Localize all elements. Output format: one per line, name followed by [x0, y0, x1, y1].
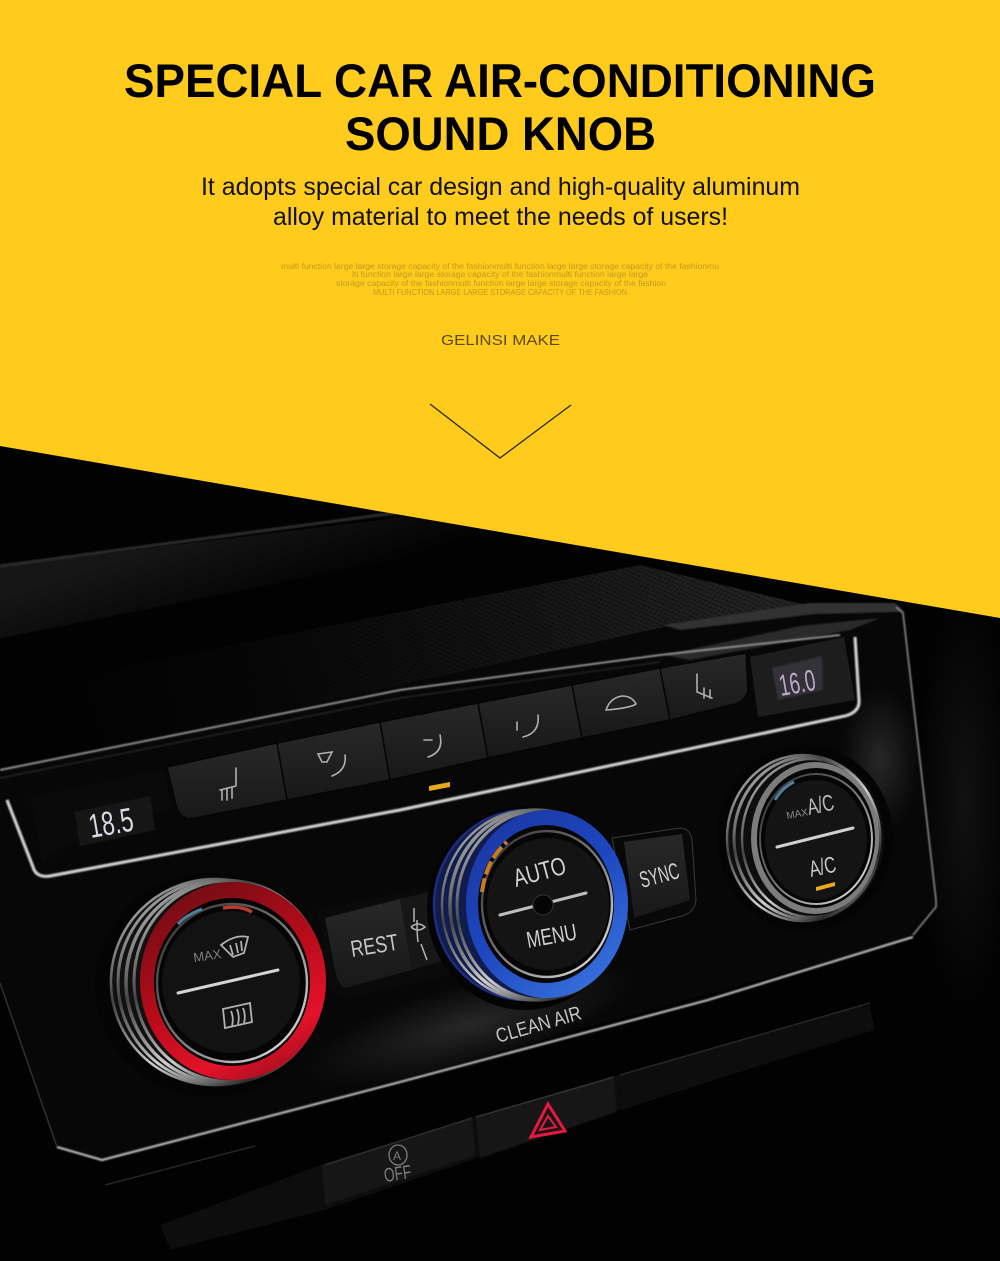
knob face — [162, 911, 300, 1053]
label: sync: SYNC — [637, 859, 682, 894]
amber indicator — [429, 782, 450, 791]
icon: seat heat left — [220, 768, 236, 800]
fine print: lti function large large storage capacity of the fashionmulti function large large — [352, 270, 649, 279]
chevron arrow — [430, 404, 571, 458]
glossy reflection — [295, 938, 645, 1112]
indicator line — [500, 893, 586, 915]
label: menu: MENU — [525, 920, 579, 954]
indicator line — [178, 970, 278, 993]
button: rest — [325, 899, 412, 988]
bottom chrome edge — [57, 937, 913, 1160]
indicator line — [777, 828, 853, 847]
button: recirculate — [572, 668, 670, 738]
brand label: GELINSI MAKE — [441, 332, 560, 349]
icon: fan — [411, 908, 427, 960]
button: windshield air — [277, 722, 390, 800]
label: max a/c: MAX — [786, 807, 809, 822]
icon: seat heat right — [697, 674, 712, 698]
subtitle: It adopts special car design and high-quality aluminum — [201, 173, 800, 201]
photo background — [0, 440, 1000, 1261]
button icons — [220, 674, 712, 800]
fine print: multi function large large storage capacity of the fashionmulti function large large storage capacity of the fashionmu — [281, 262, 719, 271]
knob: silver — [717, 745, 893, 931]
button row — [167, 653, 748, 819]
red ring — [140, 882, 326, 1080]
label: max: MAX — [192, 946, 223, 965]
title: SOUND KNOB — [345, 107, 656, 160]
subtitle: alloy material to meet the needs of users! — [273, 203, 728, 231]
button: fan — [400, 890, 446, 970]
panel outer highlights — [664, 603, 905, 630]
fine print — [281, 262, 719, 297]
left display — [30, 770, 172, 863]
knob face — [765, 780, 867, 900]
title: SPECIAL CAR AIR-CONDITIONING — [124, 54, 876, 107]
icon: rear defrost — [223, 1003, 252, 1028]
label: a/c upper: A/C — [805, 790, 837, 821]
yellow header background — [0, 0, 1000, 618]
button: foot air — [478, 685, 582, 758]
icon: foot air — [517, 715, 538, 737]
temperature right: 16.0 — [776, 664, 818, 703]
icon: hazard triangle — [531, 1104, 565, 1137]
button: seat heat right — [660, 653, 748, 720]
button: face air — [380, 703, 488, 780]
label: off: OFF — [383, 1161, 413, 1187]
lower chrome line — [7, 637, 859, 876]
temperature left: 18.5 — [86, 801, 136, 846]
icon: front defrost — [221, 936, 248, 957]
lower button row — [105, 1003, 875, 1250]
subtitle — [201, 173, 800, 231]
right display — [750, 637, 855, 717]
knob face — [487, 838, 609, 970]
label: a/c lower: A/C — [807, 852, 839, 883]
blue ring — [466, 810, 628, 998]
button: seat heat left — [167, 743, 287, 819]
label: clean air: CLEAN AIR — [493, 1002, 584, 1048]
icon: auto hold off — [383, 1145, 413, 1187]
label: auto: AUTO — [510, 851, 569, 892]
fine print: MULTI FUNCTION LARGE LARGE STORAGE CAPACITY OF THE FASHION — [373, 288, 627, 297]
control panel — [0, 603, 938, 1162]
leather dashboard — [0, 565, 835, 750]
icon: face air — [424, 735, 441, 757]
icon: recirculate — [606, 696, 636, 710]
label: rest: REST — [349, 930, 400, 963]
button cluster: rest and fan — [318, 828, 696, 998]
fine print: storage capacity of the fashionmulti function large large storage capacity of the fashion — [336, 279, 666, 288]
icon: windshield air — [318, 752, 345, 776]
title — [124, 54, 876, 160]
amber indicator a/c — [816, 882, 835, 891]
dashboard trim strip — [0, 513, 520, 650]
knob: blue — [427, 806, 628, 1010]
knob: red — [95, 873, 326, 1097]
icon: auto hold off: A — [393, 1149, 401, 1163]
upper chrome line — [0, 635, 840, 778]
button: sync — [612, 828, 696, 930]
